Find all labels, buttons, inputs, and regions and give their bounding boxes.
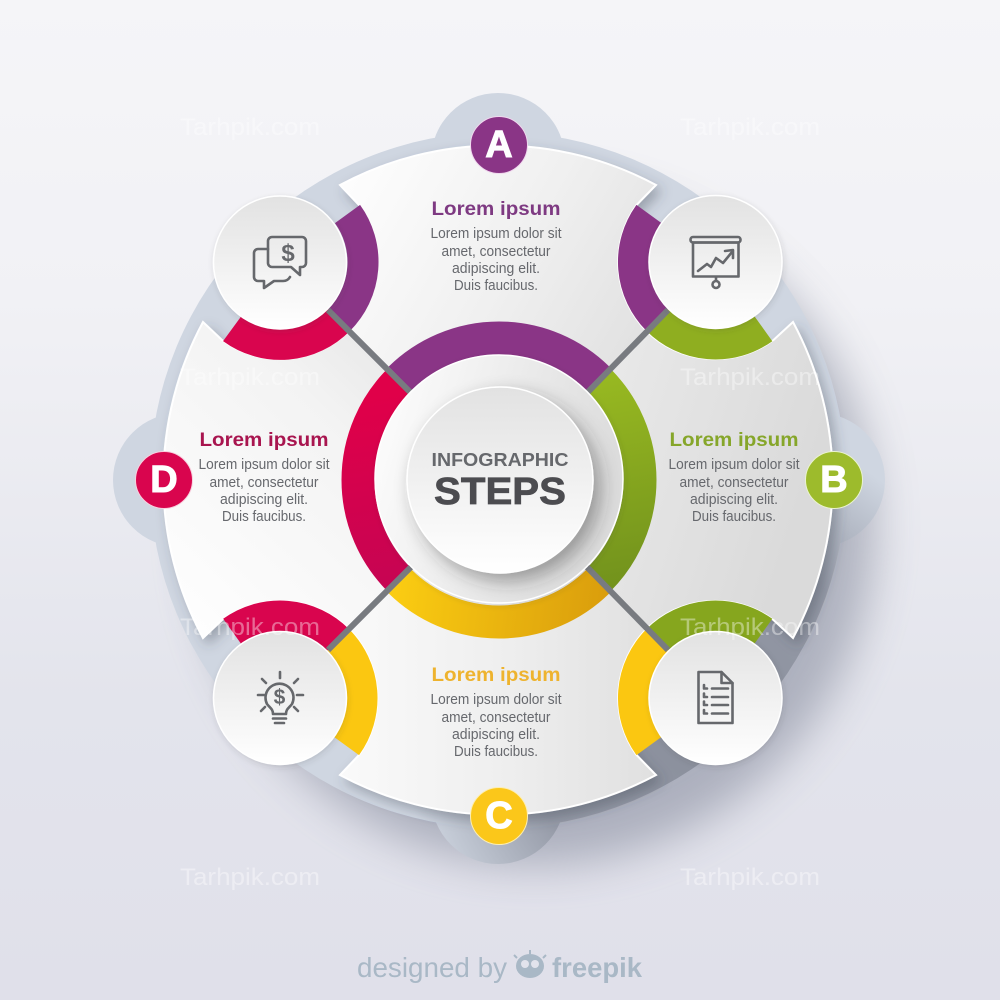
- petal panels: [163, 145, 833, 815]
- ring arc: bottom-right green: [658, 616, 763, 640]
- ring arc: bottom-right yellow: [633, 640, 658, 746]
- ring arc: top-left purple: [339, 214, 363, 320]
- watermarks: Tarhpik.com: [180, 114, 320, 141]
- watermarks: Tarhpik.com: [680, 364, 820, 391]
- central ring: [358, 338, 640, 622]
- text block: C: [430, 665, 562, 760]
- ring arc: bottom-left red: [232, 616, 338, 640]
- footer credit: freepik: [552, 952, 642, 983]
- icon: checklist document: [698, 672, 732, 723]
- badge: A: [470, 116, 528, 174]
- backing circle with tabs: [113, 93, 885, 864]
- text block: C: amet, consectetur: [442, 710, 551, 726]
- text block: A: Lorem ipsum dolor sit: [430, 226, 562, 242]
- text block: D: Lorem ipsum dolor sit: [198, 457, 330, 473]
- text block: D: amet, consectetur: [210, 475, 319, 491]
- text block: C: adipiscing elit.: [452, 727, 540, 743]
- badge: B: B: [820, 459, 848, 501]
- central ring: red: [358, 380, 399, 580]
- icon circle: chat: [214, 196, 346, 329]
- watermarks: Tarhpik.com: [680, 614, 820, 641]
- divider lines: [328, 310, 668, 650]
- badge: D: D: [150, 459, 178, 501]
- watermarks: Tarhpik.com: [680, 114, 820, 141]
- icon circle: light bulb: [214, 632, 346, 764]
- text block: D: Lorem ipsum: [200, 430, 328, 451]
- icon: freepik mascot: [514, 950, 546, 978]
- title: [432, 450, 569, 513]
- text block: D: [198, 430, 330, 525]
- text block: B: [668, 430, 800, 525]
- text block: D: Duis faucibus.: [222, 509, 306, 525]
- text block: B: Lorem ipsum dolor sit: [668, 457, 800, 473]
- central ring: purple: [400, 338, 598, 378]
- text block: A: amet, consectetur: [442, 244, 551, 260]
- central disc: [375, 355, 623, 603]
- badge: D: [136, 452, 192, 508]
- text block: A: adipiscing elit.: [452, 261, 540, 277]
- text block: A: Duis faucibus.: [454, 278, 538, 294]
- watermarks: Tarhpik.com: [180, 364, 320, 391]
- panel: B: [498, 322, 833, 638]
- text block: B: Duis faucibus.: [692, 509, 776, 525]
- badge: A: A: [485, 124, 513, 166]
- watermarks: [180, 114, 820, 891]
- panel: D: [163, 322, 498, 638]
- icon circle: presentation: [649, 196, 782, 328]
- badge: B: [806, 452, 862, 508]
- central ring: green: [599, 380, 640, 580]
- text block: D: adipiscing elit.: [220, 492, 308, 508]
- footer credit: [357, 950, 642, 983]
- ring arc: top-right purple: [633, 214, 658, 320]
- text block: B: Lorem ipsum: [670, 430, 798, 451]
- centre badge with title: [407, 387, 593, 573]
- text block: A: Lorem ipsum: [432, 199, 560, 220]
- panel: A: [340, 145, 656, 480]
- small rings around icon circles: [232, 214, 763, 746]
- watermarks: Tarhpik.com: [180, 614, 320, 641]
- panel: C: [340, 480, 656, 815]
- watermarks: Tarhpik.com: [180, 864, 320, 891]
- text block: C: Lorem ipsum: [432, 665, 560, 686]
- icon: presentation board: [690, 237, 740, 288]
- text block: C: Lorem ipsum dolor sit: [430, 692, 562, 708]
- icon: light bulb with dollar: $: [274, 686, 286, 709]
- badge: C: C: [485, 795, 513, 837]
- icon circle: document: [649, 632, 782, 764]
- footer credit: designed by: [357, 952, 507, 983]
- title: STEPS: [434, 471, 566, 513]
- icon: chat bubbles with dollar: $: [281, 240, 295, 267]
- text block: A: [430, 199, 562, 294]
- central ring: yellow: [400, 582, 598, 622]
- title: INFOGRAPHIC: [432, 450, 569, 470]
- ring arc: bottom-left yellow: [338, 640, 362, 746]
- watermarks: Tarhpik.com: [680, 864, 820, 891]
- ring arc: top-left red: [232, 320, 339, 344]
- ring arc: top-right green: [658, 320, 763, 344]
- soft cast shadow: [195, 185, 875, 865]
- text block: B: amet, consectetur: [680, 475, 789, 491]
- text block: B: adipiscing elit.: [690, 492, 778, 508]
- badge: C: [470, 788, 528, 844]
- text block: C: Duis faucibus.: [454, 744, 538, 760]
